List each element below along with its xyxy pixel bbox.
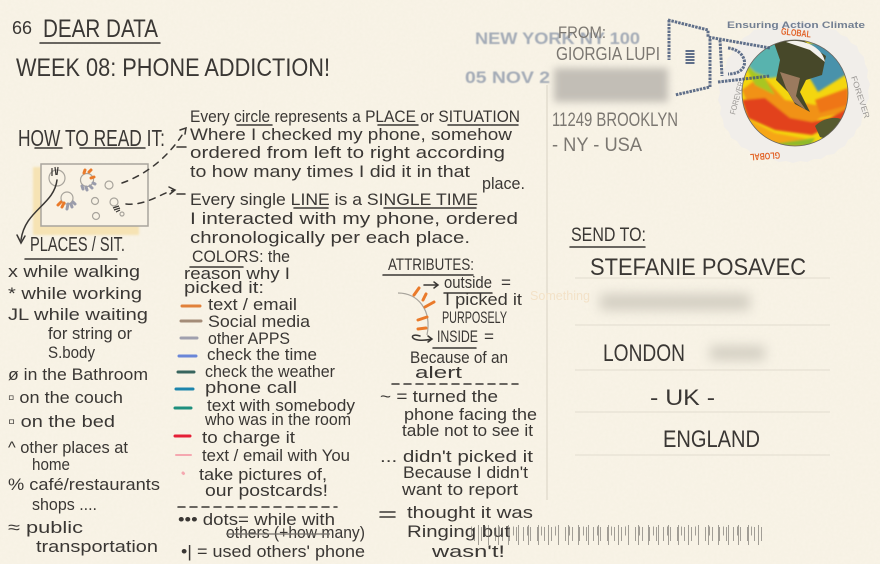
legend: attributes: thought it was <box>407 503 533 522</box>
text: how to read explanation: place. <box>482 174 525 193</box>
heading: how to read it: HOW TO READ IT: <box>18 125 165 151</box>
text: how to read explanation: Every single LINE is a SINGLE TIME <box>190 190 478 209</box>
stamp: global forever: GLOBAL <box>780 26 812 41</box>
legend: colors: ••• dots= while with <box>178 510 335 529</box>
legend: colors: text / email with You <box>202 446 350 465</box>
legend: attributes: Ringing but <box>407 522 510 541</box>
blurred street address <box>600 294 765 360</box>
legend: colors <box>175 247 365 561</box>
legend: colors: text / email <box>208 295 297 314</box>
legend: colors: COLORS: the <box>192 247 290 266</box>
recipient address: ENGLAND <box>663 426 760 453</box>
legend: attributes: Because of an <box>410 348 508 367</box>
legend: places and situations: home <box>32 455 70 474</box>
legend: places and situations: shops .... <box>32 495 97 514</box>
stamp: global forever: FOREVER <box>849 75 871 120</box>
legend: attributes: INSIDE <box>437 327 478 346</box>
text: how to read explanation: I interacted with my phone, ordered <box>190 209 518 228</box>
legend: colors: check the time <box>207 345 317 364</box>
legend: attributes: want to report <box>401 480 518 499</box>
faint orange show-through: Something <box>530 288 590 303</box>
legend: colors: check the weather <box>205 362 335 381</box>
legend: attributes: Because I didn't <box>403 463 528 482</box>
legend: colors: reason why I <box>184 264 290 283</box>
legend: attributes: table not to see it <box>402 421 533 440</box>
blurred return address <box>554 68 668 102</box>
legend: attributes: wasn't! <box>431 542 505 561</box>
legend: places and situations: transportation <box>36 537 158 556</box>
return address: - NY - USA <box>552 135 642 156</box>
legend: colors: take pictures of, <box>199 465 327 484</box>
text: how to read explanation <box>177 107 525 247</box>
postmark: cancellation lines: Ensuring Action Climate <box>727 20 865 30</box>
recipient address: SEND TO: <box>571 225 646 246</box>
stamp: global forever <box>730 28 870 160</box>
legend: places and situations: % café/restaurants <box>8 475 160 494</box>
legend: places and situations: * while working <box>8 284 142 303</box>
legend: attributes: PURPOSELY <box>442 308 507 327</box>
text: how to read explanation: ordered from left to right according <box>190 143 505 162</box>
legend: attributes: phone facing the <box>404 405 537 424</box>
legend: attributes: outside <box>444 273 492 292</box>
legend: places and situations: PLACES / SIT. <box>30 234 125 256</box>
text: how to read explanation: to how many times I did it in that <box>190 162 470 181</box>
recipient address: STEFANIE POSAVEC <box>590 254 806 281</box>
postmark: date text: NEW YORK NY 100 <box>475 29 640 48</box>
postmark: cancellation lines <box>668 20 865 95</box>
color key: marker strokes <box>175 306 201 474</box>
return address <box>552 23 678 156</box>
barcode ghost marks <box>471 531 762 535</box>
legend: colors: other APPS <box>208 329 290 348</box>
sketch: example legend illustration <box>33 164 148 235</box>
legend: colors: who was in the room <box>204 410 351 429</box>
postmark: date text <box>465 29 640 87</box>
return address: FROM: <box>558 23 606 42</box>
legend: colors: Social media <box>208 312 311 331</box>
legend: places and situations: x while walking <box>8 262 140 281</box>
legend: places and situations: ▫ on the bed <box>8 412 115 431</box>
legend: attributes <box>380 255 537 561</box>
return address: GIORGIA LUPI <box>556 44 660 64</box>
return address: 11249 BROOKLYN <box>552 110 678 131</box>
legend: colors: •| = used others' phone <box>181 542 365 561</box>
title block: 66 <box>12 18 32 38</box>
legend: places and situations: JL while waiting <box>8 305 148 324</box>
globe <box>742 38 850 150</box>
legend: colors: our postcards! <box>205 481 328 500</box>
legend: attributes: alert <box>415 363 462 382</box>
legend: places and situations: ^ other places at <box>8 438 128 457</box>
legend: colors: others (+how many) <box>226 523 365 542</box>
arrows from sketch <box>17 128 186 243</box>
legend: attributes: ~ = turned the <box>380 387 498 406</box>
legend: attributes: I picked it <box>445 290 522 309</box>
legend: colors: to charge it <box>202 428 295 447</box>
legend: attributes: ATTRIBUTES: <box>388 255 474 274</box>
text: how to read explanation: chronologically per each place. <box>190 228 470 247</box>
recipient address: - UK - <box>650 385 715 410</box>
recipient address: LONDON <box>603 340 685 367</box>
legend: places and situations: S.body <box>48 343 95 362</box>
legend: attributes: = <box>501 273 511 292</box>
legend: places and situations: ▫ on the couch <box>8 388 123 407</box>
legend: colors: picked it: <box>184 278 264 297</box>
postmark: date text: 05 NOV 2 <box>465 68 550 87</box>
legend: places and situations: ø in the Bathroom <box>8 365 148 384</box>
stamp: global forever: GLOBAL <box>750 149 780 162</box>
stamp: global forever: FOREVER <box>728 80 746 116</box>
title block: WEEK 08: PHONE ADDICTION! <box>16 54 330 82</box>
title block: DEAR DATA <box>43 15 158 43</box>
title block <box>12 15 330 82</box>
legend: attributes: ... didn't picked it <box>380 447 533 466</box>
legend: places and situations: for string or <box>48 324 132 343</box>
recipient address <box>570 225 830 455</box>
icon: circle with outside and inside marks <box>398 282 438 342</box>
legend: places and situations <box>8 234 160 556</box>
postcard divider <box>546 85 548 500</box>
legend: attributes: = <box>484 327 494 346</box>
text: how to read explanation: Where I checked my phone, somehow <box>190 125 513 144</box>
text: how to read explanation: Every circle represents a PLACE or SITUATION <box>190 107 520 126</box>
legend: colors: phone call <box>205 378 297 397</box>
legend: colors: text with somebody <box>207 396 356 415</box>
legend: places and situations: ≈ public <box>8 518 84 537</box>
